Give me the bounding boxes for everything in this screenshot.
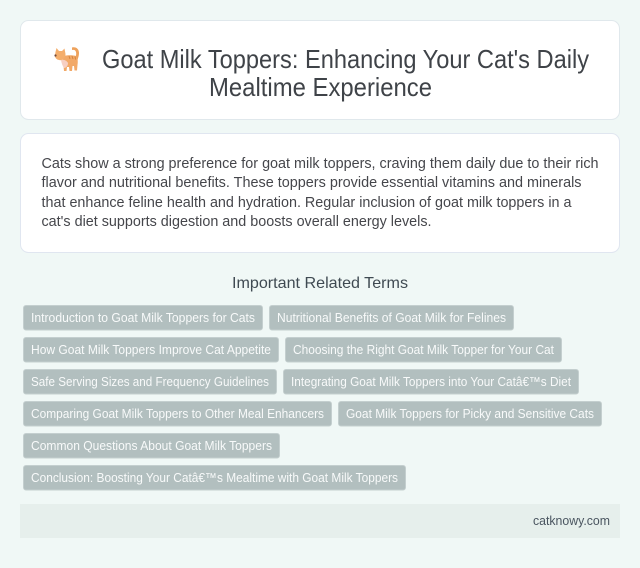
title: Goat Milk Toppers: Enhancing Your Cat's Daily — [102, 46, 589, 74]
tag: Introduction to Goat Milk Toppers for Cats — [31, 310, 255, 325]
footer: catknowy.com — [533, 513, 610, 528]
tag — [286, 338, 562, 362]
tag — [24, 466, 406, 490]
tag — [338, 402, 602, 426]
text block: summary — [42, 156, 598, 230]
tag — [24, 306, 262, 330]
tag: Conclusion: Boosting Your Catâ€™s Mealtime with Goat Milk Toppers — [31, 470, 398, 485]
panel: related term tags — [24, 306, 602, 490]
title: Mealtime Experience — [209, 74, 432, 102]
tag: Comparing Goat Milk Toppers to Other Meal Enhancers — [31, 406, 324, 421]
tag: Common Questions About Goat Milk Toppers — [31, 438, 272, 453]
tag: Integrating Goat Milk Toppers into Your Catâ€™s Diet — [291, 374, 571, 389]
text block: summary: that enhance feline health and hydration. Regular inclusion of goat milk toppers in a — [42, 195, 572, 211]
heading: related terms: Important Related Terms — [232, 275, 408, 292]
tag — [284, 370, 578, 394]
footer — [20, 504, 620, 538]
tag: Safe Serving Sizes and Frequency Guidelines — [31, 374, 269, 389]
panel: title card — [20, 20, 620, 120]
title — [102, 46, 589, 102]
text block: summary: Cats show a strong preference for goat milk toppers, craving them daily due to their rich — [42, 156, 598, 172]
text block: summary: flavor and nutritional benefits. These toppers provide essential vitamins and minerals — [42, 175, 582, 191]
tag: Choosing the Right Goat Milk Topper for Your Cat — [293, 342, 554, 357]
panel: summary paragraph — [20, 134, 620, 252]
text block: summary: cat's diet supports digestion and boosts overall energy levels. — [42, 214, 432, 230]
icon: orange cat — [54, 47, 79, 71]
tag — [24, 370, 276, 394]
tag — [270, 306, 514, 330]
tag — [24, 338, 278, 362]
tag — [24, 434, 280, 458]
tag: How Goat Milk Toppers Improve Cat Appetite — [31, 342, 271, 357]
tag — [24, 402, 332, 426]
tag: Goat Milk Toppers for Picky and Sensitive Cats — [346, 406, 594, 421]
tag: Nutritional Benefits of Goat Milk for Felines — [277, 310, 506, 325]
